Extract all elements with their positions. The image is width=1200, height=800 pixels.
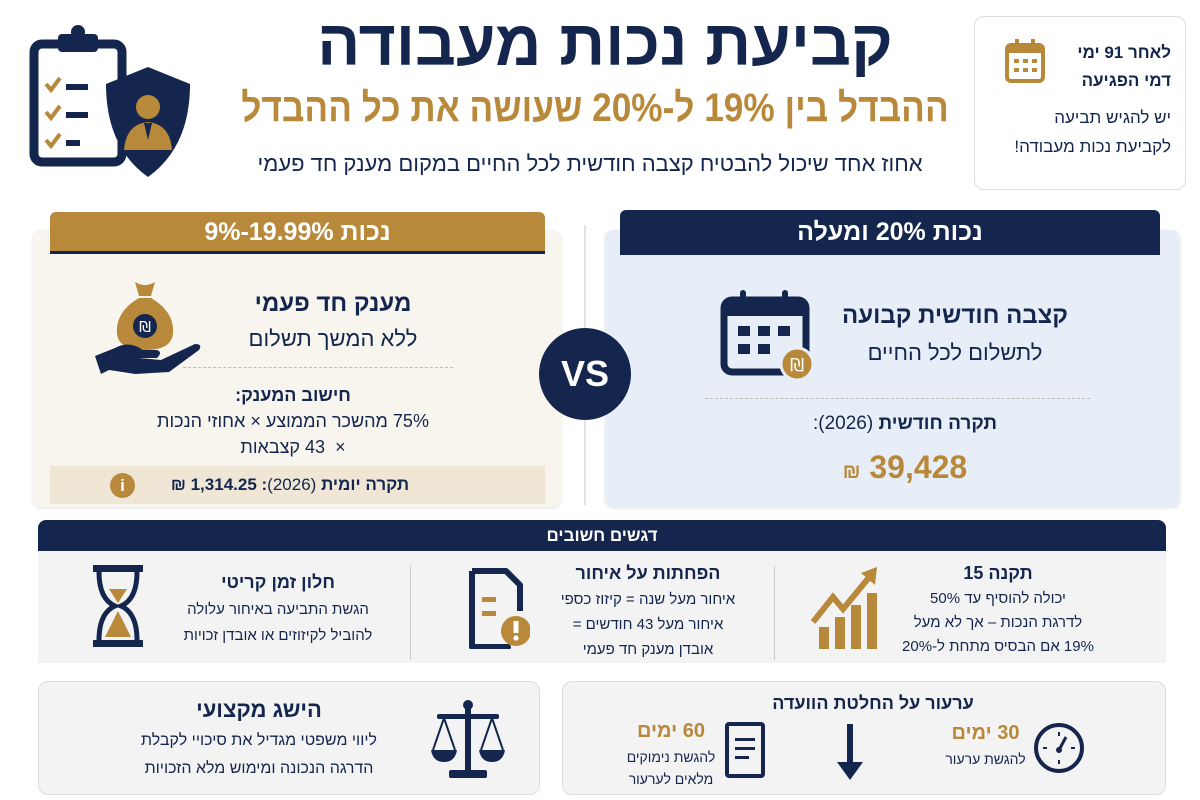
step: 30 days: להגשת ערעור bbox=[945, 751, 1026, 767]
text: fixed monthly pension: קצבה חודשית קבועה bbox=[842, 302, 1068, 329]
step: 30 days bbox=[945, 722, 1026, 767]
panel: 9%-19.99%: ללא המשך תשלום bbox=[249, 326, 417, 351]
text: one-time grant: מענק חד פעמי bbox=[255, 290, 411, 317]
step: 60 days: מלאים לערעור bbox=[629, 771, 713, 787]
icon: clipboard with shield bbox=[30, 25, 190, 177]
callout text: דמי הפגיעה bbox=[1082, 71, 1171, 90]
tagline: אחוז אחד שיכול להבטיח קצבה חודשית לכל החיים במקום מענק חד פעמי bbox=[257, 151, 923, 176]
icon: calendar with shekel bbox=[720, 290, 812, 378]
panel: 20% and above: ₪ 39,428 bbox=[843, 449, 967, 485]
VS circle: VS bbox=[561, 353, 609, 394]
subtitle: ההבדל בין 19% ל-20% שעושה את כל ההבדל bbox=[241, 86, 949, 130]
note: reduction for delay: איחור מעל 43 חודשים = bbox=[573, 616, 723, 633]
icon: info bbox=[110, 473, 135, 498]
panel: professional achievement: ליווי משפטי מגדיל את סיכויי לקבלת bbox=[141, 732, 377, 749]
icon: hourglass bbox=[93, 565, 143, 647]
panel header: נכות 9%-19.99% bbox=[204, 218, 391, 246]
icon: clock bbox=[1034, 723, 1084, 773]
panel header bbox=[50, 212, 545, 254]
text: monthly ceiling: תקרה חודשית (2026): bbox=[813, 413, 997, 434]
panel: 20% and above: לתשלום לכל החיים bbox=[868, 340, 1042, 365]
note: critical time window: הגשת התביעה באיחור עלולה bbox=[187, 601, 369, 618]
VS circle bbox=[539, 328, 631, 420]
note: critical time window: חלון זמן קריטי bbox=[221, 572, 335, 592]
icon: scales bbox=[431, 700, 505, 778]
note: reduction for delay: אובדן מענק חד פעמי bbox=[583, 641, 713, 658]
header band bbox=[38, 520, 1166, 551]
step: 60 days: להגשת נימוקים bbox=[627, 749, 715, 765]
heading: ערעור על החלטת הוועדה bbox=[772, 693, 974, 713]
icon: document warning bbox=[469, 568, 530, 649]
daily ceiling bar: תקרה יומית (2026): ₪ 1,314.25 bbox=[171, 475, 409, 494]
callout: 91 days: לקביעת נכות מעבודה! bbox=[1014, 137, 1171, 156]
icon: money bag in hand bbox=[95, 282, 200, 374]
icon: document bbox=[725, 722, 765, 778]
note: regulation 15: ‏19% אם הבסיס מתחת ל-20% bbox=[902, 638, 1094, 655]
divider vertical bbox=[584, 225, 586, 505]
icon: calendar gold bbox=[1005, 39, 1045, 83]
daily ceiling bar bbox=[50, 466, 545, 504]
panel: appeal on committee decision bbox=[562, 681, 1166, 795]
callout text: לאחר 91 ימי bbox=[1077, 43, 1171, 62]
panel header: נכות 20% ומעלה bbox=[797, 218, 983, 246]
note: regulation 15 bbox=[811, 563, 1094, 655]
text: grant calculation bbox=[157, 385, 429, 457]
icon: info: i bbox=[120, 476, 125, 495]
note: reduction for delay: איחור מעל שנה = קיזוז כספי bbox=[561, 591, 735, 608]
icon: rising chart bbox=[811, 567, 877, 649]
panel: 9%-19.99% bbox=[32, 212, 562, 509]
icon: calendar with shekel: ₪ bbox=[790, 355, 804, 376]
note: regulation 15: תקנה 15 bbox=[963, 563, 1033, 583]
header band: דגשים חשובים bbox=[547, 526, 657, 545]
panel: professional achievement: הדרגה הנכונה ומימוש מלא הזכויות bbox=[145, 760, 373, 777]
text: grant calculation: × 43 קצבאות bbox=[240, 437, 346, 457]
note: critical time window bbox=[93, 565, 372, 647]
panel header bbox=[620, 210, 1160, 255]
callout: 91 days bbox=[974, 16, 1186, 190]
note: critical time window: להוביל לקיזוזים או אובדן זכויות bbox=[184, 627, 372, 644]
text: grant calculation: 75% מהשכר הממוצע × אחוזי הנכות bbox=[157, 411, 429, 431]
panel: professional achievement: הישג מקצועי bbox=[196, 697, 322, 722]
title: קביעת נכות מעבודה bbox=[317, 7, 893, 79]
note: reduction for delay: הפחתות על איחור bbox=[576, 563, 720, 583]
callout text bbox=[1077, 43, 1171, 90]
icon: money bag in hand: ₪ bbox=[139, 318, 151, 336]
panel: 20% and above bbox=[604, 210, 1181, 509]
step: 60 days: 60 ימים bbox=[637, 720, 705, 742]
note: regulation 15: יכולה להוסיף עד 50% bbox=[930, 590, 1066, 607]
step: 30 days: 30 ימים bbox=[951, 722, 1020, 744]
step: 60 days bbox=[627, 720, 715, 787]
text: grant calculation: חישוב המענק: bbox=[235, 385, 351, 405]
note: regulation 15: לדרגת הנכות – אך לא מעל bbox=[914, 614, 1082, 631]
panel: professional achievement bbox=[38, 681, 540, 795]
panel: important notes bbox=[38, 520, 1166, 663]
note: reduction for delay bbox=[469, 563, 735, 658]
callout: 91 days: יש להגיש תביעה bbox=[1054, 108, 1171, 127]
arrow: down bbox=[837, 724, 863, 780]
